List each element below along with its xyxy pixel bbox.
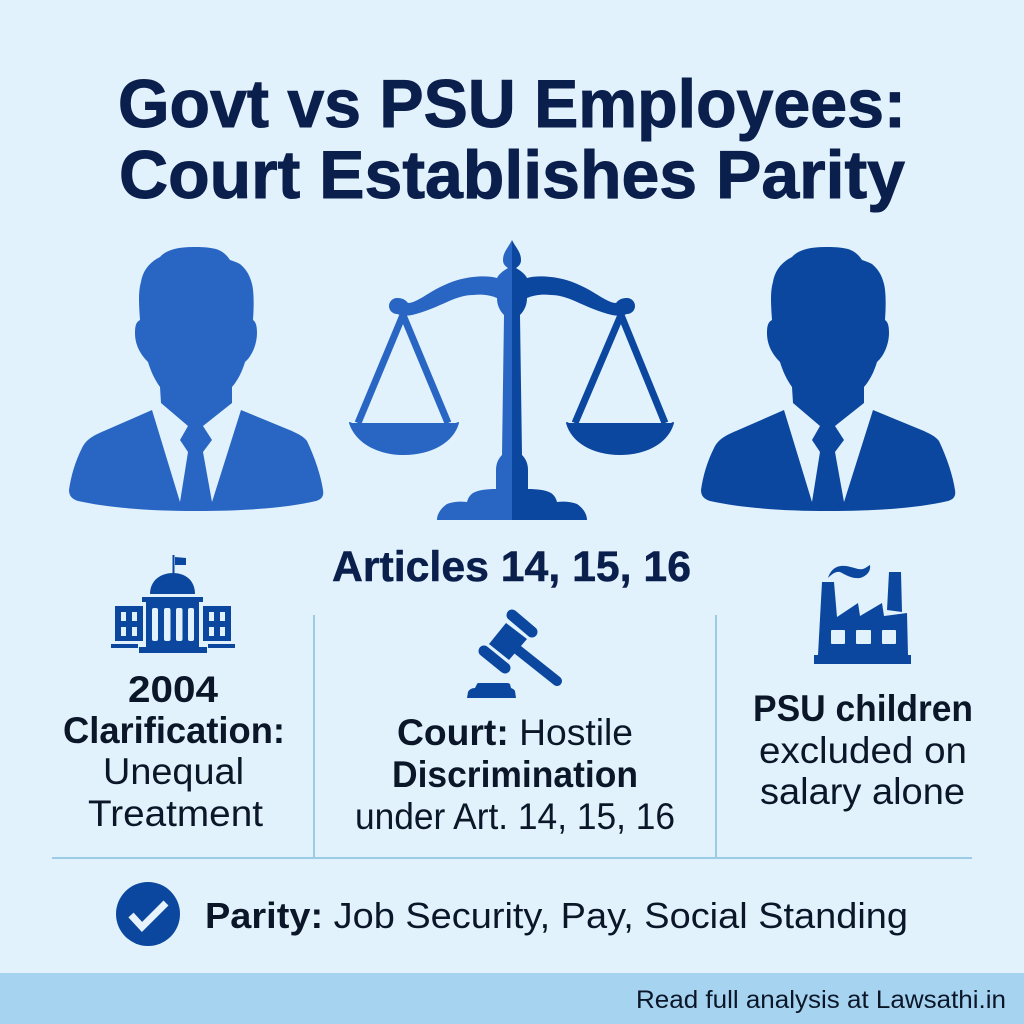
- text: 2004 clarification: Unequal: [103, 751, 244, 792]
- title: [118, 66, 906, 213]
- text: court finding: Discrimination: [392, 754, 638, 795]
- icon: gavel: [467, 615, 557, 698]
- text: court finding: Court: Hostile: [397, 712, 633, 753]
- text: PSU children: PSU children: [753, 688, 973, 729]
- text: 2004 clarification: Clarification:: [63, 710, 285, 751]
- text: PSU children: [753, 688, 973, 812]
- icon: government building: [111, 555, 235, 653]
- icon: factory: [814, 565, 911, 664]
- footer band: [0, 973, 1024, 1024]
- right half of scale: [512, 240, 674, 520]
- footer text: Read full analysis at Lawsathi.in: [636, 986, 1006, 1014]
- left half of scale: [349, 240, 512, 520]
- heading: articles: Articles 14, 15, 16: [332, 543, 691, 591]
- text: 2004 clarification: Treatment: [88, 793, 264, 834]
- text: 2004 clarification: 2004: [128, 669, 218, 710]
- icon: check badge: [116, 882, 180, 946]
- text: PSU children: excluded on: [759, 730, 967, 771]
- text: PSU children: salary alone: [760, 771, 965, 812]
- text: court finding: [355, 712, 675, 837]
- text: parity: Parity: Job Security, Pay, Social Standing: [205, 895, 908, 936]
- icon: PSU employee silhouette: [701, 247, 955, 511]
- icon: government employee silhouette: [69, 247, 323, 511]
- title: Govt vs PSU Employees:: [118, 66, 906, 142]
- text: court finding: under Art. 14, 15, 16: [355, 796, 675, 837]
- icon: scales of justice: [349, 240, 674, 520]
- text: 2004 clarification: [63, 669, 285, 834]
- title: Court Establishes Parity: [119, 137, 905, 213]
